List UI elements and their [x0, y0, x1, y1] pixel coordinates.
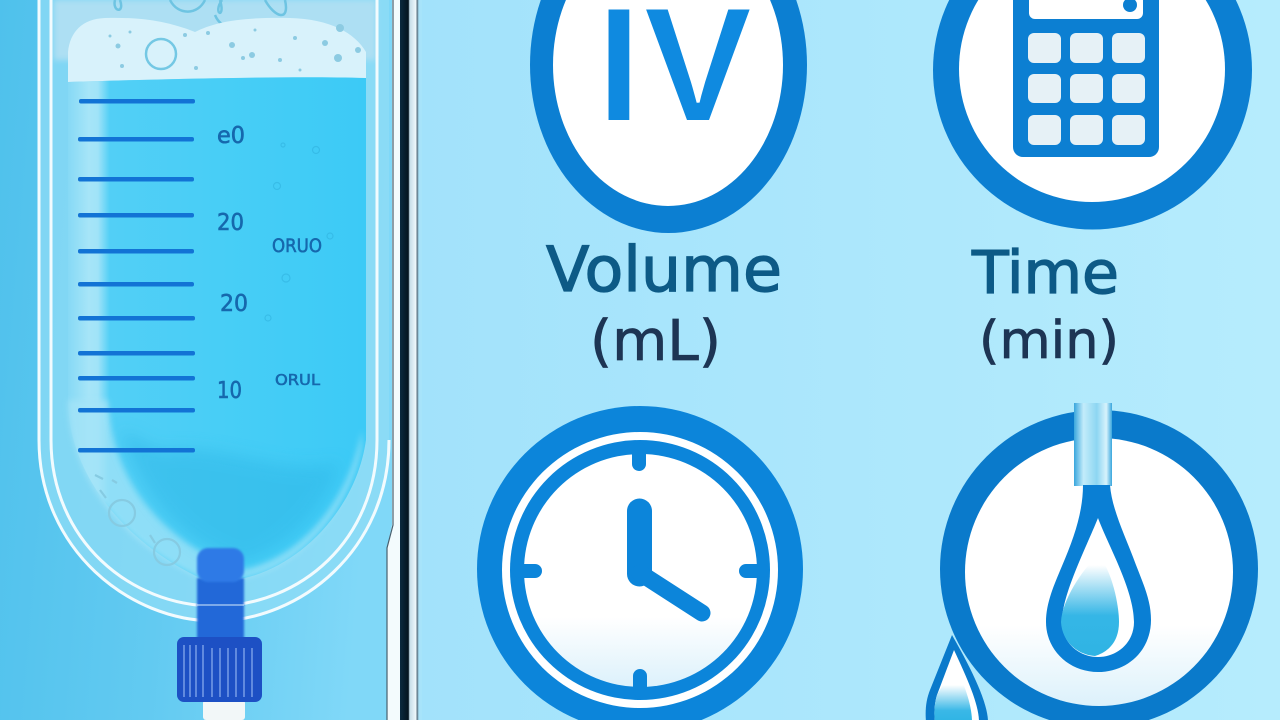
- calculator keys: [1028, 33, 1145, 145]
- bag body tint: [39, 0, 389, 621]
- small bubbles in liquid: [265, 143, 333, 321]
- scale labels: 20: [220, 291, 248, 317]
- bag port and cap: [177, 548, 262, 720]
- scale labels: e0: [217, 123, 245, 149]
- white nozzle: [203, 700, 245, 720]
- scale labels: [217, 123, 322, 404]
- bag outlines: [39, 0, 389, 621]
- large drop fluid: [1061, 555, 1119, 656]
- clock hands: [640, 511, 702, 613]
- label: Volume (mL): (mL): [590, 309, 721, 374]
- ribbed cap: [177, 637, 262, 702]
- scale labels: 10: [217, 378, 242, 404]
- calculator screen: [1029, 0, 1143, 19]
- scale labels: ORUO: [272, 235, 322, 257]
- label: Time (min): [971, 238, 1119, 371]
- icon: volume IV circle: [530, 0, 807, 233]
- large drop interior: [1062, 518, 1134, 657]
- small falling drop: [926, 635, 988, 720]
- graduation ticks: [78, 99, 195, 452]
- scale labels: ORUL: [275, 371, 321, 389]
- iv bag: [39, 0, 389, 621]
- liquid: [68, 77, 366, 578]
- calculator dot: [1123, 0, 1137, 12]
- liquid lower pale band: [68, 400, 362, 578]
- calculator body: [1013, 0, 1159, 157]
- label: Time (min): (min): [979, 311, 1119, 371]
- label: Time (min): Time: [971, 238, 1119, 307]
- label: Volume (mL): Volume: [546, 233, 782, 306]
- liquid lower shade: [120, 430, 340, 562]
- port top: [197, 548, 244, 582]
- feed tube: [1074, 403, 1112, 486]
- foam headspace: [68, 18, 366, 82]
- crossing bag line: [197, 604, 244, 606]
- bubbles lower edge: [95, 475, 180, 565]
- label: Volume (mL): [546, 233, 782, 374]
- scale labels: 20: [217, 210, 244, 236]
- icon: clock: [477, 406, 803, 720]
- background: right panel: [410, 0, 1280, 720]
- background: left panel: [0, 0, 400, 720]
- clock ticks: [520, 450, 762, 690]
- icon: drip drop circle: [926, 403, 1258, 720]
- icon: calculator circle: [933, 0, 1252, 230]
- iv pole: [387, 0, 422, 720]
- large drop outline: [1046, 485, 1151, 672]
- bag upper headspace: [54, 0, 376, 60]
- port: [197, 578, 244, 640]
